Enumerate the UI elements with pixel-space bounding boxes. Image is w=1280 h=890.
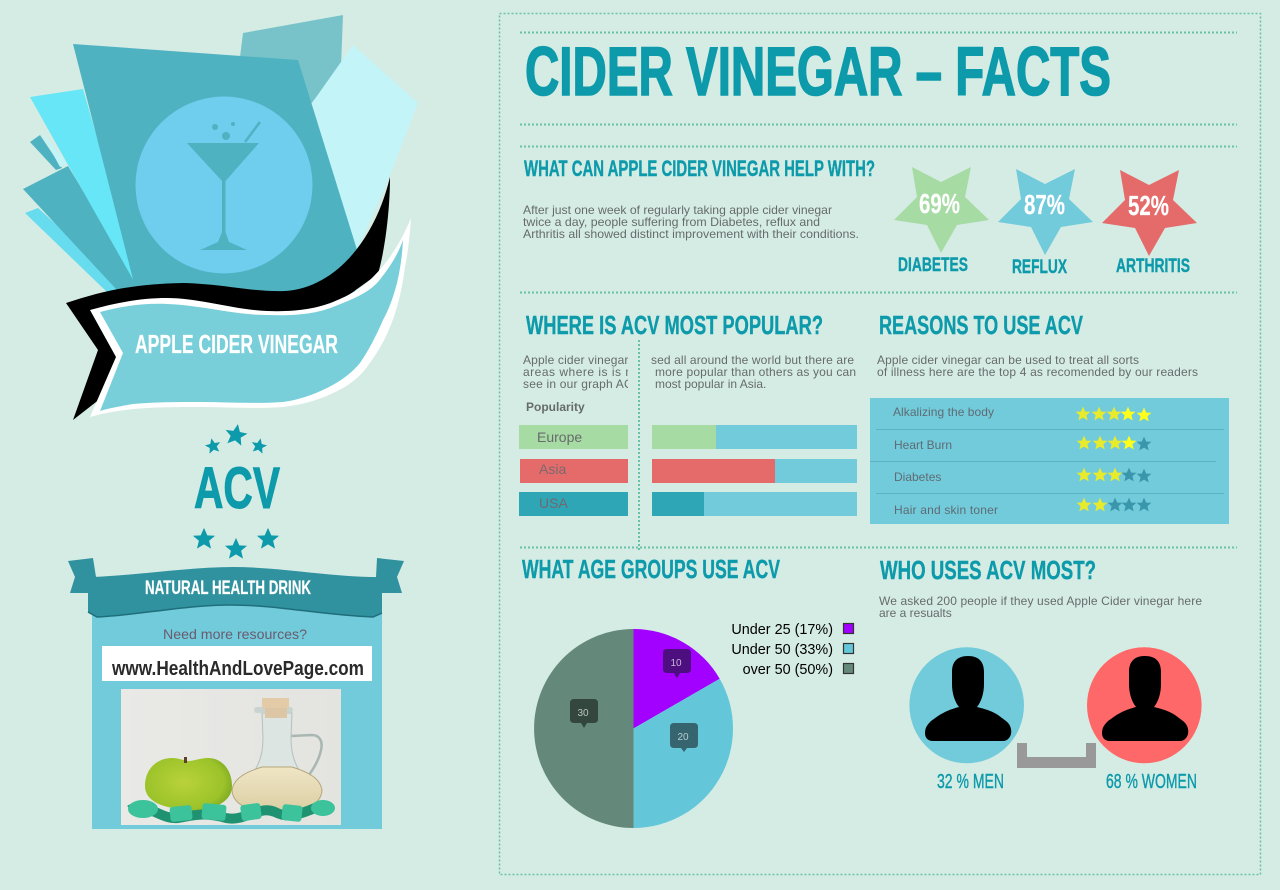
star: diabetes 69% — [894, 167, 989, 276]
icon: woman — [1087, 647, 1202, 763]
emblem: apple cider vinegar badge — [23, 15, 418, 420]
ratings table — [870, 398, 1229, 524]
ACV logo with stars — [193, 422, 280, 559]
legend: Under 25 (17%) — [731, 622, 833, 638]
label: men: 32 % MEN — [937, 771, 1004, 793]
heading: WHAT CAN APPLE CIDER VINEGAR HELP WITH? — [524, 156, 875, 181]
tooltip: 20: 20 — [677, 732, 689, 743]
description: are a resualts — [879, 606, 952, 620]
description, split by fold: areas where is is m — [523, 365, 636, 379]
connector bracket — [1017, 743, 1096, 768]
description, split by fold: see in our graph ACV — [523, 377, 641, 391]
heading: REASONS TO USE ACV — [879, 310, 1083, 340]
pie chart — [534, 629, 733, 828]
star: reflux 87%: REFLUX — [1012, 257, 1067, 278]
bar: Asia: Asia — [539, 461, 566, 477]
bar: USA — [519, 492, 857, 516]
row: hair and skin: Hair and skin toner — [894, 503, 998, 517]
banner label: NATURAL HEALTH DRINK — [145, 577, 311, 599]
section: reasons to use ACV — [870, 310, 1229, 524]
row: alkalizing: Alkalizing the body — [893, 405, 994, 419]
star: arthritis 52%: ARTHRITIS — [1116, 256, 1190, 277]
bar: Asia — [520, 459, 857, 483]
tooltip: 30: 30 — [577, 708, 589, 719]
legend — [731, 622, 854, 678]
white ribbon outline — [90, 218, 411, 417]
photo: apple, vinegar jug and tape measure — [121, 689, 341, 825]
star: arthritis 52%: 52% — [1128, 190, 1169, 221]
black ribbon shadow — [66, 177, 390, 420]
description: Arthritis all showed distinct improvement with their conditions. — [523, 227, 859, 241]
description, split by fold: sed all around the world but there are — [651, 353, 854, 367]
website box: www.HealthAndLovePage.com — [111, 658, 364, 680]
description, split by fold — [523, 353, 856, 391]
legend: over 50 (50%) — [743, 662, 833, 678]
star: diabetes 69%: DIABETES — [898, 255, 968, 276]
star: reflux 87% — [998, 169, 1093, 278]
row: heart burn — [894, 436, 1151, 452]
description: twice a day, people suffering from Diabetes, reflux and — [523, 215, 820, 229]
legend: Under 50 (33%) — [731, 642, 833, 658]
resources panel — [92, 600, 382, 829]
description: After just one week of regularly taking apple cider vinegar — [523, 203, 832, 217]
tooltip: 20 — [670, 723, 698, 752]
section: who uses ACV most — [879, 555, 1202, 793]
icon: man — [909, 647, 1024, 763]
bar: USA: USA — [539, 495, 568, 511]
description, split by fold: Apple cider vinegar is — [523, 353, 641, 367]
tooltip: 10 — [663, 649, 691, 678]
description: Apple cider vinegar can be used to treat all sorts — [877, 353, 1139, 367]
star: arthritis 52% — [1102, 170, 1197, 277]
teal ribbon — [100, 240, 403, 411]
heading: WHERE IS ACV MOST POPULAR? — [526, 310, 823, 340]
section: what can it help with — [523, 156, 1197, 278]
bar: Europe — [519, 425, 857, 449]
section: where is ACV most popular — [519, 310, 857, 516]
right panel frame and dividers — [500, 14, 1260, 874]
label: women: 68 % WOMEN — [1106, 771, 1197, 793]
row: heart burn: Heart Burn — [894, 438, 952, 452]
ribbon label: APPLE CIDER VINEGAR — [135, 329, 338, 359]
description — [877, 353, 1198, 379]
description: We asked 200 people if they used Apple Cider vinegar here — [879, 594, 1202, 608]
resources prompt: Need more resources? — [163, 626, 307, 642]
heading: WHAT AGE GROUPS USE ACV — [522, 554, 780, 584]
row: diabetes: Diabetes — [894, 470, 941, 484]
description, split by fold: most popular in Asia. — [655, 377, 766, 391]
star: diabetes 69%: 69% — [919, 188, 960, 219]
tooltip: 10: 10 — [670, 658, 682, 669]
row: hair and skin — [894, 498, 1151, 517]
banner: natural health drink — [68, 558, 404, 617]
ACV logo with stars: ACV — [194, 456, 280, 521]
heading: WHO USES ACV MOST? — [880, 555, 1096, 585]
description: of illness here are the top 4 as recomended by our readers — [877, 365, 1198, 379]
star: reflux 87%: 87% — [1024, 189, 1065, 220]
website box — [102, 646, 372, 681]
icon: martini glass — [187, 122, 260, 250]
tooltip: 30 — [570, 699, 598, 728]
section: age groups — [522, 554, 854, 828]
description — [523, 203, 859, 241]
chart title: Popularity — [526, 400, 585, 414]
description, split by fold: more popular than others as you can — [655, 365, 856, 379]
description — [879, 594, 1202, 620]
row: diabetes — [894, 468, 1151, 484]
row: alkalizing — [893, 405, 1151, 421]
bar: Europe: Europe — [537, 429, 582, 445]
